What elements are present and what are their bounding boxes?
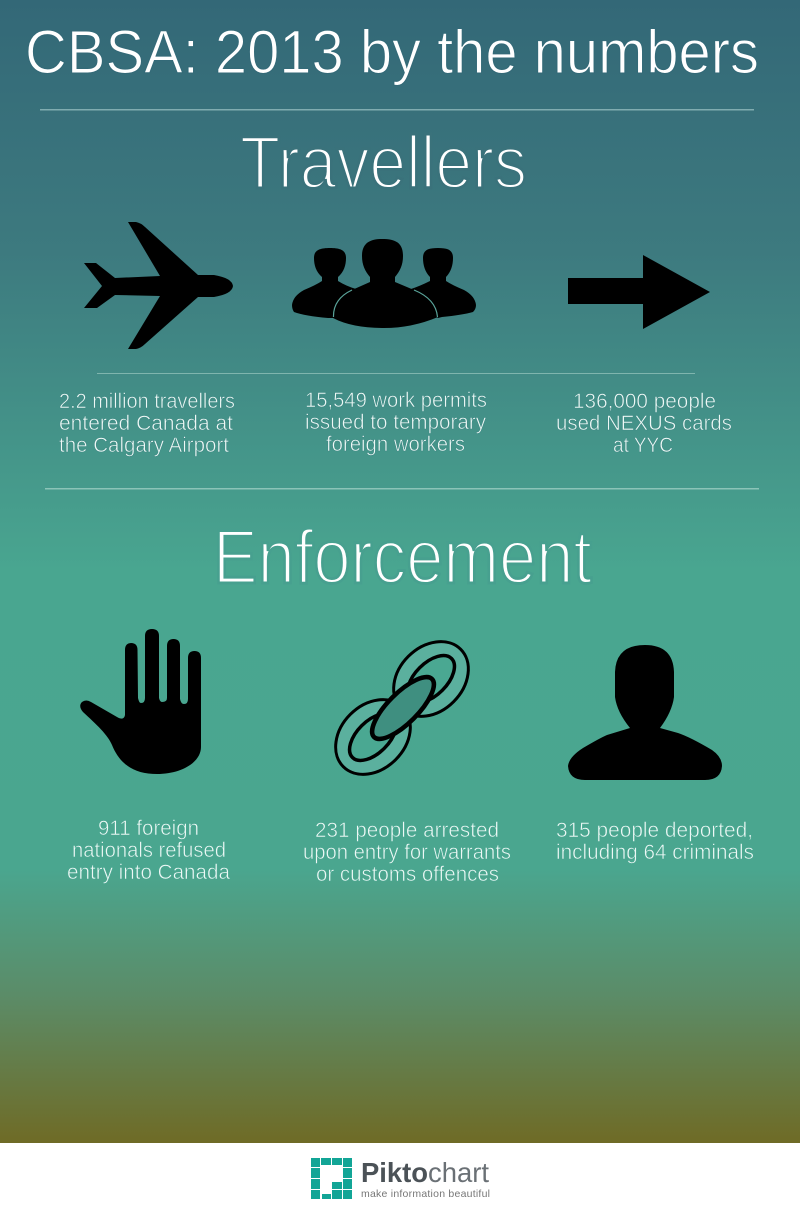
stat: nexus cards: at YYC (613, 434, 673, 457)
stat: work permits: 15,549 work permits (305, 389, 487, 412)
heading: travellers: Travellers (240, 121, 527, 204)
stat: refused entry: entry into Canada (67, 861, 230, 884)
stat: arrests: or customs offences (316, 863, 499, 886)
stat: airport travellers: the Calgary Airport (59, 434, 229, 457)
stat: refused entry: nationals refused (72, 839, 226, 862)
stat: arrests (303, 819, 511, 886)
stat: airport travellers (59, 390, 235, 457)
heading: enforcement: Enforcement (213, 515, 592, 600)
stat: nexus cards: used NEXUS cards (556, 412, 732, 435)
icon: right arrow (568, 255, 710, 329)
stat: airport travellers: entered Canada at (59, 412, 233, 435)
stat: arrests: 231 people arrested (315, 819, 499, 842)
icon: person silhouette (568, 645, 722, 780)
stat: work permits (305, 389, 487, 456)
title: CBSA: 2013 by the numbers (25, 18, 759, 86)
stat: deportations: 315 people deported, (556, 819, 753, 842)
panel: enforcement (67, 515, 754, 886)
footer: piktochart logo (0, 1143, 800, 1216)
stat: airport travellers: 2.2 million travellers (59, 390, 235, 413)
icon: airplane (84, 222, 233, 349)
icon: piktochart mark (311, 1158, 352, 1199)
logo wordmark: Piktochart (361, 1157, 489, 1188)
logo tagline: make information beautiful (361, 1188, 490, 1200)
icon: raised hand (80, 629, 201, 774)
stat: refused entry: 911 foreign (98, 817, 199, 840)
stat: arrests: upon entry for warrants (303, 841, 511, 864)
stat: deportations: including 64 criminals (556, 841, 754, 864)
panel: travellers (59, 121, 732, 457)
stat: deportations (556, 819, 754, 864)
stat: work permits: issued to temporary (305, 411, 486, 434)
icon: group of people (292, 239, 476, 328)
stat: nexus cards (556, 390, 732, 457)
icon: chain links (321, 627, 483, 789)
stat: refused entry (67, 817, 230, 884)
stat: work permits: foreign workers (326, 433, 465, 456)
stat: nexus cards: 136,000 people (573, 390, 716, 413)
